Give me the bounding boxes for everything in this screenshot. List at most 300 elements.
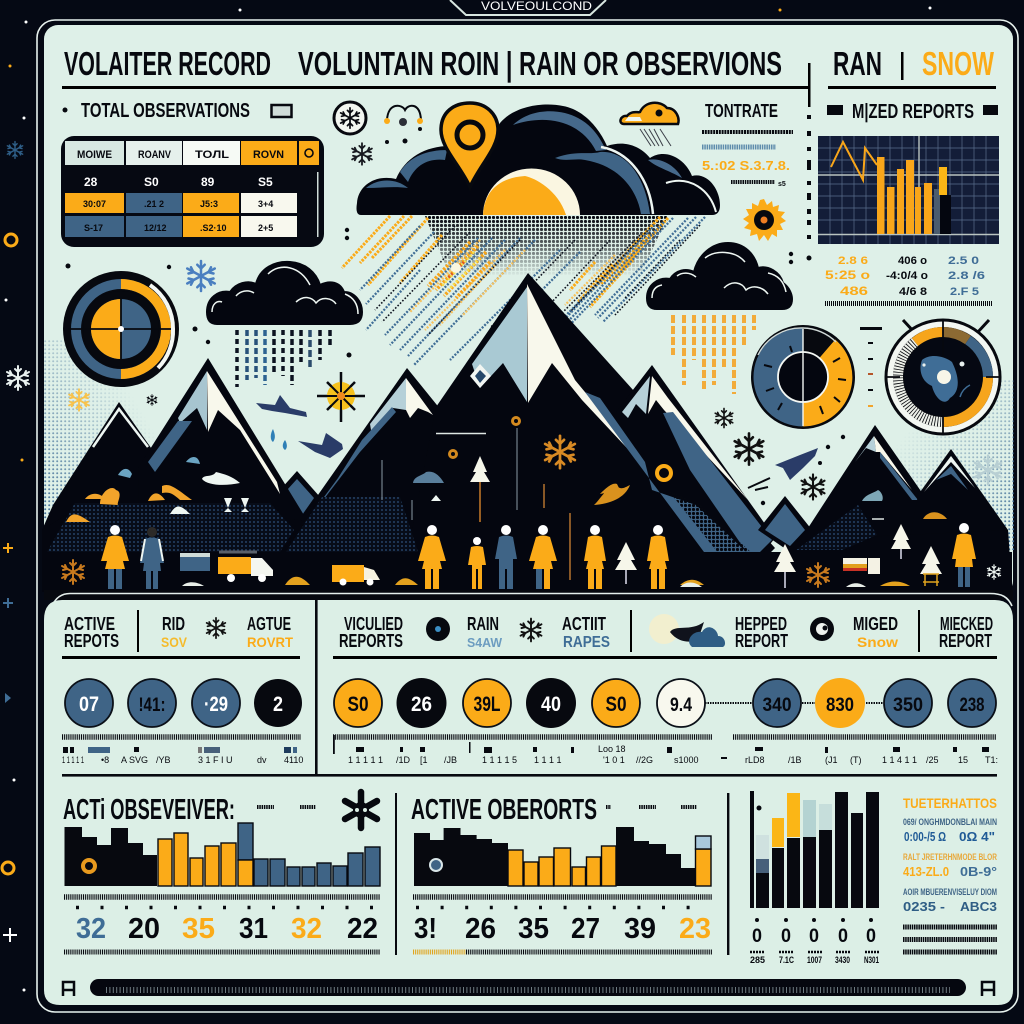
table row two: 30:07	[83, 199, 106, 209]
report heading group left	[62, 610, 300, 659]
cloud highlights	[366, 111, 716, 214]
micro legend middle: 1 1 1 1	[534, 755, 562, 765]
axis values	[750, 918, 879, 966]
table row two: .21 2	[144, 199, 164, 209]
table row two: 3+4	[258, 199, 273, 209]
circle s0 second: S0	[606, 693, 626, 716]
small peak right	[758, 496, 812, 552]
white sparkle	[987, 565, 1001, 579]
icon: snowflake right three	[801, 474, 825, 500]
left cloud rain	[237, 330, 330, 387]
icon: right plane	[775, 448, 818, 480]
side text block: tontrate: 5.:02 S.3.7.8.	[702, 158, 790, 173]
rain and snow heading	[828, 45, 996, 89]
table row two: J5:3	[200, 199, 218, 209]
report heading group right	[333, 610, 997, 659]
separator	[918, 610, 920, 652]
label: miged: MIGED	[853, 614, 898, 634]
mountain center left	[278, 368, 470, 560]
circle 2: 2	[273, 693, 283, 716]
top tab	[450, 0, 606, 15]
micro legend middle: [1	[420, 755, 428, 765]
circle 40	[526, 678, 576, 728]
slope amber plane	[594, 484, 630, 505]
circle 9.4	[657, 679, 705, 727]
icon: amber ring	[83, 860, 95, 872]
ground	[42, 500, 1012, 592]
stat two	[903, 852, 997, 879]
chart values: 2.8 6	[838, 255, 868, 267]
label: miecked: MIECKED	[940, 614, 993, 634]
micro legend left: 1 1 1 1 1	[62, 755, 84, 765]
stat one: 0:00-/5 Ω	[904, 829, 946, 844]
table	[61, 136, 324, 247]
axis values: 1007	[807, 955, 822, 966]
icon: sun	[743, 199, 786, 241]
label: rovrt: ROVRT	[247, 634, 293, 650]
table row three: 2+5	[258, 223, 273, 233]
separator	[630, 610, 632, 652]
value 31: 3!	[414, 913, 437, 945]
amber truck	[218, 552, 273, 582]
micro legend right: 15	[958, 755, 968, 765]
label: actiit: ACTIIT	[562, 614, 606, 634]
micro legend left: •8	[101, 755, 109, 765]
halftone slope three	[668, 490, 755, 578]
icon: small cluster	[147, 395, 157, 405]
circle 41	[128, 679, 176, 727]
micro legend middle: //2G	[636, 755, 653, 765]
micro dots	[416, 906, 710, 909]
table row one: S5	[258, 175, 273, 189]
blue clouds	[118, 457, 200, 478]
axis values: 0	[809, 926, 819, 947]
chart values: 2.F 5	[950, 286, 979, 298]
table row three	[65, 172, 318, 237]
mountain far right	[900, 449, 1012, 592]
blue truck	[180, 553, 210, 571]
axis values: N301	[864, 955, 879, 966]
person seven	[584, 525, 606, 589]
separator	[137, 610, 139, 652]
title part one: VOLAITER RECORD	[64, 45, 271, 82]
value 39: 39	[624, 913, 656, 945]
light amber rain	[410, 240, 615, 330]
micro lines	[903, 927, 997, 952]
table header	[65, 141, 319, 165]
table row three: 12/12	[144, 223, 167, 233]
barcode bottom	[64, 950, 380, 954]
scene: details on slopes	[66, 418, 947, 580]
circle 830: 830	[826, 695, 854, 716]
label: report: REPORT	[735, 631, 788, 651]
value 35: 35	[182, 913, 215, 945]
circle 26	[396, 678, 446, 728]
micro legend middle: Loo 18	[598, 744, 626, 754]
circle 340	[753, 679, 801, 727]
slope lines	[382, 428, 517, 520]
stat three	[903, 887, 997, 914]
side stats block	[903, 796, 997, 952]
table header: ROVN	[253, 149, 284, 161]
half sun	[483, 169, 580, 215]
chart values: 2.5 0	[948, 255, 979, 267]
label: rapes: RAPES	[563, 634, 610, 651]
map pin	[441, 103, 498, 187]
label: sov: SOV	[161, 634, 188, 650]
colon dots	[345, 228, 349, 240]
small pale triangle	[431, 495, 441, 501]
scene: aircraft and drops	[256, 372, 1001, 505]
left rain cloud	[207, 262, 362, 324]
amber rain	[342, 216, 668, 307]
icon: left mark	[63, 982, 74, 996]
micro legend right: rLD8	[745, 755, 765, 765]
rule under legends	[62, 774, 997, 777]
micro legend left: 3 1 F I U	[198, 755, 233, 765]
icon: arc with drops	[384, 106, 423, 144]
micro legend middle	[333, 735, 712, 765]
axis values: 3430	[835, 955, 850, 966]
label: snow: Snow	[857, 634, 898, 650]
amber flower left	[62, 560, 84, 584]
amber and blue bars	[158, 823, 380, 886]
chart values: 406 o	[898, 255, 927, 267]
person three	[418, 525, 446, 589]
vertical divider chart two	[727, 793, 729, 955]
label: rain: RAIN	[467, 614, 499, 634]
circle 350: 350	[893, 695, 923, 716]
stat one	[903, 817, 997, 844]
amber rings	[450, 418, 520, 458]
barcode	[64, 894, 380, 900]
icon: black flower	[345, 792, 377, 828]
micro legend left: 4110	[284, 755, 303, 765]
rule	[62, 656, 300, 659]
progress bar	[90, 979, 966, 996]
icon: snowflake	[521, 619, 541, 641]
icon: cloud and bird	[649, 614, 725, 647]
table row one: 89	[201, 175, 215, 189]
micro legend middle: 1 1 1 1 1	[348, 755, 383, 765]
circle 238	[948, 679, 996, 727]
panel: upper scene	[44, 25, 1013, 595]
people	[101, 523, 976, 589]
last stacked bar	[696, 836, 711, 886]
value 22: 22	[347, 913, 378, 945]
chart: mixed reports	[818, 136, 999, 244]
barcode bottom	[413, 950, 712, 954]
icon: drops	[271, 429, 287, 450]
value 20: 20	[128, 913, 160, 945]
icon: snowflake right two	[735, 433, 763, 465]
amber mounds left	[85, 485, 192, 505]
micro dots	[76, 906, 375, 909]
title	[62, 45, 810, 107]
vertical divider chart one	[395, 793, 397, 955]
icon: badge	[810, 617, 834, 641]
label: reports: REPORTS	[339, 631, 403, 651]
halftone slope two	[286, 497, 418, 552]
circle 39l	[463, 679, 511, 727]
label: reports: REPOTS	[64, 631, 119, 651]
person six	[529, 525, 557, 589]
circle 2	[254, 679, 302, 727]
gauge ticks	[860, 327, 882, 407]
amber ring large	[657, 466, 671, 480]
icon: plane two	[298, 433, 343, 458]
side text block: tontrate: TONTRATE	[705, 101, 778, 121]
icon: white ring	[430, 859, 442, 871]
halftone sky gradients	[44, 340, 1014, 550]
amber flower right	[807, 563, 829, 587]
value 31: 31	[239, 913, 268, 945]
circle 07	[65, 679, 113, 727]
title part two: VOLUNTAIN ROIN | RAIN OR OBSERVIONS	[298, 45, 782, 82]
circle 29	[192, 679, 240, 727]
stat one: 0Ω 4"	[959, 829, 995, 844]
tree two	[774, 544, 796, 588]
table row one: 28	[84, 175, 98, 189]
micro legend right: /25	[926, 755, 939, 765]
micro legend right: (T)	[850, 755, 862, 765]
central peak	[400, 273, 775, 592]
tree four	[920, 546, 942, 586]
micro legend left: /YB	[156, 755, 171, 765]
side text block: tontrate: s5	[778, 181, 786, 188]
icon: snowflake	[207, 618, 225, 638]
chart line	[831, 142, 877, 180]
icon: snowflake amber	[69, 389, 89, 411]
axis values: 0	[838, 926, 848, 947]
stat circles	[65, 678, 996, 728]
pale cloud right	[862, 490, 883, 501]
icon: snowflake right one	[715, 408, 733, 428]
micro legend right: /1B	[788, 755, 802, 765]
bar ticks	[106, 987, 950, 993]
chart panel left	[63, 792, 380, 952]
heading: TUETERHATTOS	[903, 796, 997, 811]
dark rain	[375, 225, 700, 335]
tree three	[891, 524, 911, 559]
icon: faint snowflake	[975, 456, 1001, 484]
icon: snow badge	[334, 102, 366, 134]
small amber mound	[66, 514, 90, 522]
rain burst	[428, 242, 490, 298]
amber mound right	[923, 512, 947, 519]
chart values: -4:0/4 o	[886, 270, 928, 282]
person two	[140, 527, 164, 589]
footer bar	[63, 979, 994, 996]
micro marks	[257, 805, 316, 809]
title divider	[808, 63, 810, 107]
chart panel right: stacked bars	[750, 791, 879, 966]
circle 41: !41:	[138, 695, 166, 716]
table row one	[84, 175, 273, 189]
rule	[333, 656, 997, 659]
amber snowflake	[545, 436, 575, 468]
person nine	[952, 523, 976, 587]
mixed reports heading: M|ZED REPORTS	[852, 101, 974, 123]
white ground mounds	[182, 582, 866, 587]
amber bars	[508, 846, 616, 886]
mountain second	[138, 358, 310, 540]
total observations heading: TOTAL OBSERVATIONS	[81, 100, 250, 122]
icon: right mark	[982, 982, 994, 996]
blue cloud small	[413, 472, 444, 483]
axis values: 285	[750, 955, 766, 966]
stat three: ABC3	[960, 899, 997, 914]
axis values: 0	[752, 926, 762, 947]
table row one: S0	[144, 175, 159, 189]
label: active reports: ACTIVE	[64, 614, 115, 634]
left gauge	[63, 271, 179, 387]
micro legend middle: /1D	[396, 755, 411, 765]
circle 340: 340	[762, 695, 792, 716]
micro legend right: (J1	[825, 755, 838, 765]
circle 350	[884, 679, 932, 727]
amber van	[332, 565, 380, 586]
bars	[750, 791, 879, 908]
micro legend middle: '1 0 1	[603, 755, 625, 765]
central blue band	[585, 392, 755, 587]
title rule	[62, 86, 809, 89]
table header: ROANV	[138, 149, 172, 161]
micro legend left	[62, 737, 303, 765]
small trees	[224, 498, 249, 512]
ground band	[42, 552, 1012, 592]
black bars	[414, 828, 508, 886]
rain lines	[342, 216, 705, 365]
chart values	[825, 255, 992, 304]
scatter dots	[748, 435, 845, 505]
rain and snow heading: SNOW	[922, 45, 995, 82]
axis values: 7.1C	[779, 955, 794, 966]
barcode	[413, 894, 712, 900]
circle 07: 07	[79, 693, 99, 716]
mountain right	[795, 425, 950, 570]
ground mounds	[285, 577, 910, 586]
stat two: 413-ZL.0	[903, 864, 949, 879]
value 27: 27	[571, 913, 600, 945]
value 26: 26	[465, 913, 496, 945]
icon: dot badge	[426, 617, 450, 641]
micro legend right: 1 1 4 1 1	[882, 755, 917, 765]
circle 830	[815, 678, 865, 728]
mountain far left	[42, 402, 172, 560]
circle 29: ·29	[204, 693, 228, 716]
label: agtue: AGTUE	[247, 614, 291, 634]
icon: small rain cloud	[620, 103, 679, 146]
right cloud rain	[673, 315, 754, 394]
chart panel middle	[411, 794, 712, 952]
micro legend left: A SVG	[121, 755, 148, 765]
label: report: REPORT	[939, 631, 992, 651]
band between panels	[44, 590, 1013, 600]
black bars	[64, 827, 157, 886]
micro legend middle: s1000	[674, 755, 699, 765]
micro legend left: dv	[257, 755, 267, 765]
label: s4aw: S4AW	[467, 635, 503, 650]
table header: TOЛL	[195, 149, 229, 161]
circle s0	[334, 679, 382, 727]
pale mounds	[170, 472, 240, 514]
center marker line	[436, 432, 486, 434]
right rain cloud	[647, 243, 792, 309]
micro marks	[606, 805, 697, 809]
circle s0: S0	[348, 693, 368, 716]
heading: ACTIVE OBERORTS	[411, 794, 597, 826]
person five	[495, 525, 517, 589]
tree one	[615, 542, 637, 584]
circle 26: 26	[411, 693, 432, 716]
value 35: 35	[518, 913, 549, 945]
table row three: S-17	[84, 223, 103, 233]
label: hepped: HEPPED	[735, 614, 787, 634]
mountains	[42, 273, 1012, 592]
icon: plane one	[256, 395, 307, 417]
vertical divider lower	[315, 600, 318, 774]
chart values: 2.8 /6	[948, 270, 985, 282]
stat two: 0B-9°	[960, 864, 997, 879]
connector lines	[705, 702, 884, 704]
table row three: .S2·10	[200, 223, 227, 233]
table row two	[65, 193, 297, 213]
mountain right of center	[616, 365, 775, 592]
icon: amber burst	[317, 372, 365, 422]
circle 40: 40	[541, 693, 561, 716]
second black bars	[616, 827, 695, 886]
halftone slope one	[47, 503, 294, 552]
icon: blue snowflake	[187, 261, 215, 291]
icon: small snowflake	[352, 143, 372, 165]
small dots	[66, 264, 352, 358]
chart values: 5:25 o	[825, 268, 870, 282]
table header: MOIWE	[77, 149, 112, 161]
label: viculied: VICULIED	[344, 614, 403, 634]
micro legend right: T1:	[985, 755, 998, 765]
chart bars	[877, 157, 951, 234]
rain and snow heading: RAN	[833, 45, 882, 82]
circle 9.4: 9.4	[670, 695, 692, 716]
chart values: 4/6 8	[899, 286, 927, 298]
micro legend middle: /JB	[444, 755, 457, 765]
small peak left	[280, 471, 320, 530]
micro legend right	[721, 737, 998, 765]
person eight	[647, 525, 669, 589]
circle 238: 238	[960, 695, 984, 716]
middle gauge	[751, 325, 855, 429]
person four	[468, 537, 486, 589]
person one	[101, 525, 129, 589]
halftone slope four	[796, 505, 877, 550]
vehicles and trees	[62, 524, 1001, 588]
value 23: 23	[679, 913, 711, 945]
divider dots	[789, 115, 812, 264]
main cloud	[356, 103, 720, 215]
right dial	[886, 320, 1000, 434]
value 32: 32	[76, 913, 106, 945]
circle s0 second	[592, 679, 640, 727]
chart values: 486	[840, 284, 868, 298]
tree on slope	[470, 456, 490, 522]
heading: ACTi OBSEVEIVER:	[63, 794, 235, 826]
micro legend middle: 1 1 1 1 5	[482, 755, 517, 765]
blue rain	[360, 217, 705, 365]
axis values: 0	[781, 926, 791, 947]
halftone rain below main cloud	[425, 216, 668, 276]
side text block: tontrate	[702, 101, 793, 188]
